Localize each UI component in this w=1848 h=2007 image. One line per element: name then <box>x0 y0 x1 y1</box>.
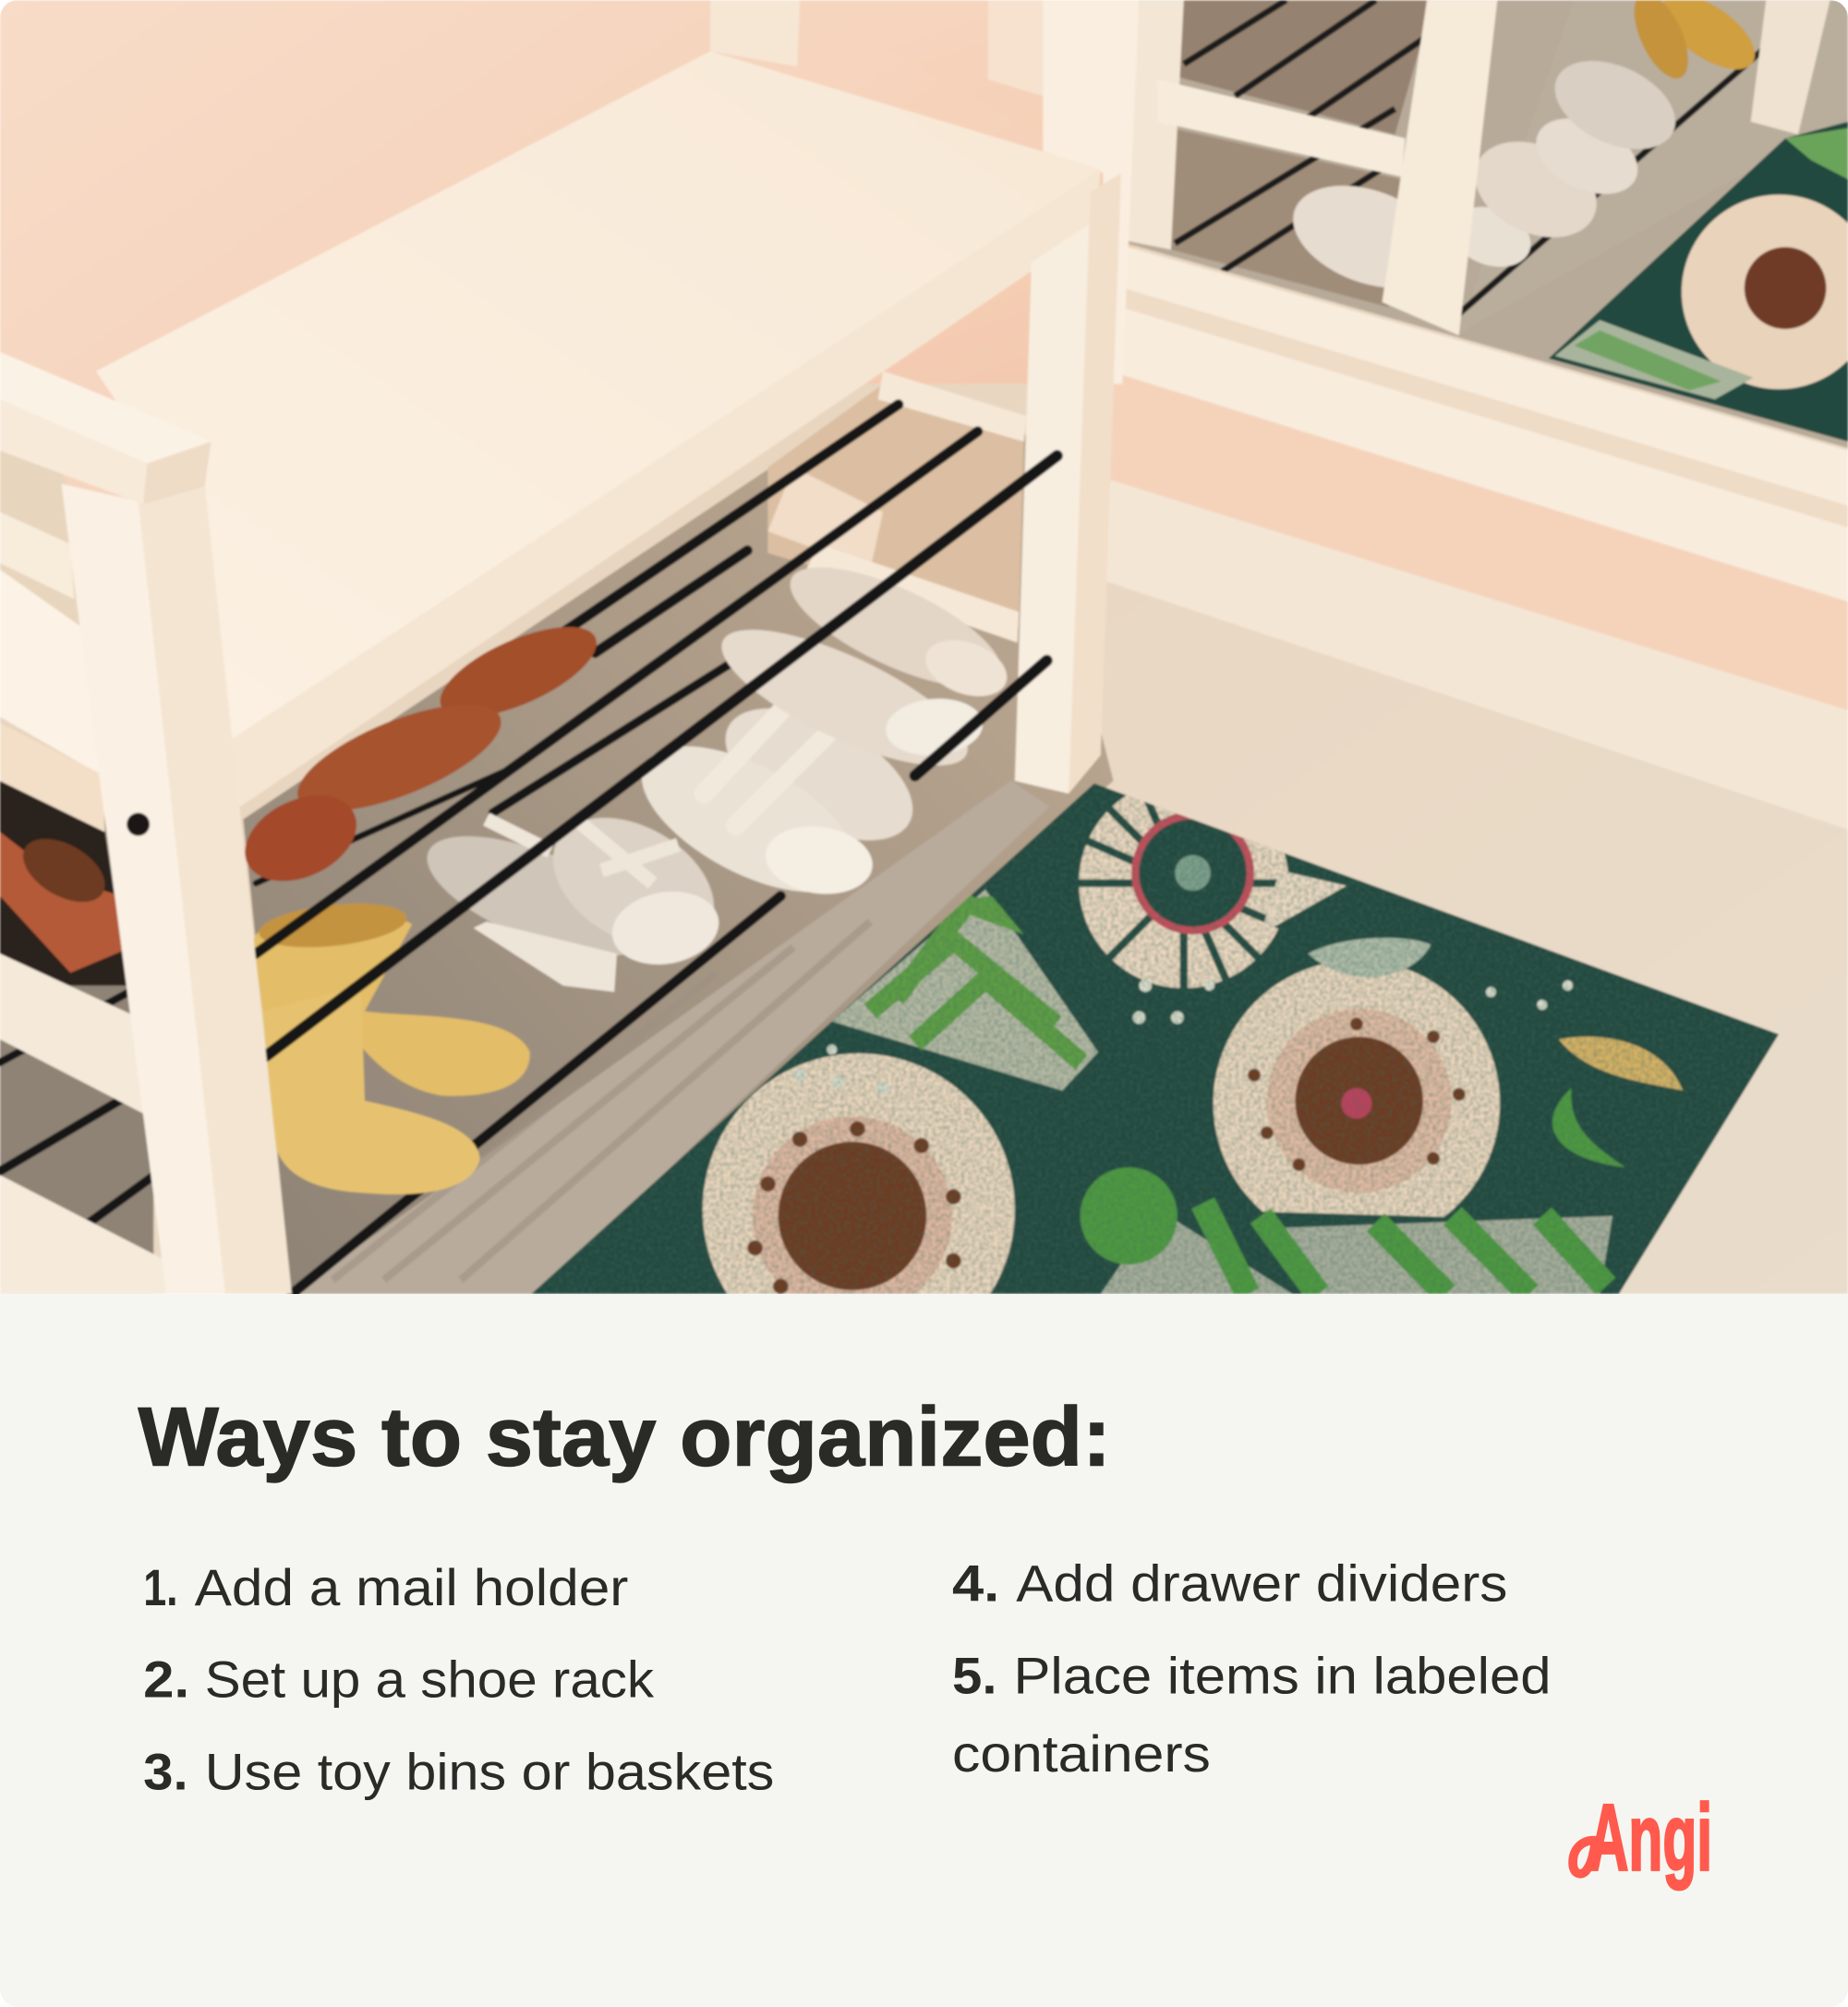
wood floor streaks <box>332 922 870 1280</box>
bench right front leg <box>1015 220 1095 793</box>
list column 2 <box>952 1555 1552 1783</box>
item 5 <box>952 1647 1552 1783</box>
bottom text panel background <box>0 1294 1848 2007</box>
left rail slats <box>0 953 149 1116</box>
bench left front leg <box>62 484 292 1294</box>
rug shag texture <box>531 783 1779 1294</box>
reflected shoes <box>1291 185 1398 288</box>
front rails <box>256 431 1057 1056</box>
item 1: 1. <box>143 1559 178 1616</box>
list column 1 <box>143 1559 774 1800</box>
mirror frame <box>1118 246 1848 601</box>
item 5: containers <box>952 1725 1211 1783</box>
rug large flower bottom <box>703 1054 1015 1366</box>
shoes: red suede flats <box>0 609 609 973</box>
rug <box>531 774 1779 1366</box>
back panel slats <box>767 384 1024 627</box>
rug pale flower at top <box>1075 774 1347 992</box>
reflected bench posts <box>1383 0 1497 335</box>
shoes: white sneakers pair 1 <box>427 811 720 994</box>
item 4: 4. <box>952 1555 999 1613</box>
back wall <box>800 0 1135 384</box>
floor <box>0 246 1848 1294</box>
back rails <box>0 405 899 1294</box>
baseboard <box>1098 480 1848 829</box>
rug large flower right <box>1214 960 1500 1247</box>
heading: Ways to stay organized: <box>139 1391 1111 1484</box>
item 2: 2. <box>143 1651 189 1709</box>
shoes: yellow rain boots <box>253 898 530 1194</box>
Angi logo <box>1573 1784 1712 1891</box>
item 2: Set up a shoe rack <box>205 1651 654 1709</box>
reflected rug <box>1549 122 1848 441</box>
item 3: Use toy bins or baskets <box>205 1743 774 1800</box>
item 5: Place items in labeled <box>1014 1647 1552 1704</box>
item 5: 5. <box>952 1647 996 1704</box>
shoes: white sneakers pair 3 <box>720 567 1009 767</box>
item 1: Add a mail holder <box>195 1559 628 1616</box>
upper bench posts <box>710 0 800 66</box>
rug striped leaf bottom right <box>1081 1167 1638 1294</box>
bench armrest cap <box>0 352 211 504</box>
shoes: white sneakers pair 2 <box>641 704 914 896</box>
Angi logo: Angi <box>1588 1784 1712 1891</box>
rug chevron patch <box>832 889 1098 1091</box>
shelf floor beneath bench <box>243 384 1114 1294</box>
right wall below mirror <box>1111 358 1848 717</box>
item 4: Add drawer dividers <box>1016 1555 1507 1613</box>
item 3: 3. <box>143 1743 188 1800</box>
photo: entryway bench with shoes and rug <box>0 0 1848 1366</box>
mirror reflection <box>1126 0 1848 461</box>
rug leaf accents <box>793 937 1683 1167</box>
bench seat <box>0 52 1101 832</box>
reflected rails <box>1175 0 1798 314</box>
left shelf floor <box>0 816 155 1254</box>
